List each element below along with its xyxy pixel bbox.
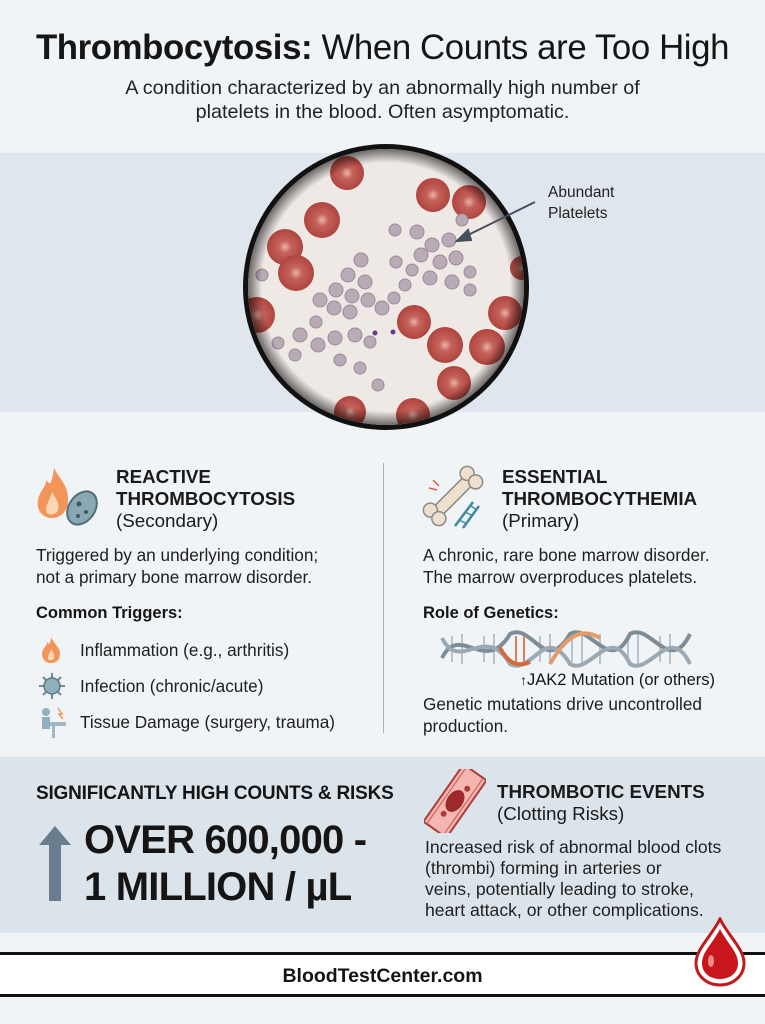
- stat: count range: 1 MILLION / µL: [84, 865, 351, 909]
- subtitle: [125, 77, 640, 123]
- text: genetics description: Genetic mutations drive uncontrolled: [423, 694, 702, 714]
- text: genetics description: production.: [423, 716, 508, 736]
- stat: count range: [84, 818, 366, 909]
- heading: essential thrombocythemia: ESSENTIAL: [502, 466, 607, 487]
- icon: blood drop: [694, 917, 746, 986]
- text: thrombotic description: veins, potentially leading to stroke,: [425, 879, 694, 899]
- heading: thrombotic events: [497, 781, 705, 824]
- list: triggers: Infection (chronic/acute): [80, 676, 263, 696]
- divider: [383, 463, 384, 733]
- icon: flame: [42, 637, 60, 663]
- text: genetics description: [423, 694, 702, 736]
- icon: blood vessel clot: [424, 769, 486, 833]
- icon: up arrow: [39, 826, 71, 901]
- heading: significantly high counts: SIGNIFICANTLY HIGH COUNTS & RISKS: [36, 783, 394, 804]
- list: triggers: Tissue Damage (surgery, trauma): [80, 712, 335, 732]
- heading: reactive thrombocytosis: REACTIVE: [116, 466, 211, 487]
- stat: count range: OVER 600,000 -: [84, 818, 366, 862]
- label: abundant platelets: [548, 184, 614, 222]
- text: essential description: [423, 545, 710, 586]
- heading: thrombotic events: THROMBOTIC EVENTS: [497, 781, 705, 802]
- footer text: BloodTestCenter.com: [282, 965, 483, 987]
- heading: essential thrombocythemia: (Primary): [502, 510, 579, 531]
- band: microscope: [0, 153, 765, 412]
- subtitle: A condition characterized by an abnormally high number of: [125, 77, 640, 99]
- diagram: dna helix: [440, 630, 692, 668]
- heading: essential thrombocythemia: THROMBOCYTHEMIA: [502, 488, 697, 509]
- label: abundant platelets: Abundant: [548, 184, 614, 201]
- footer: [0, 952, 765, 997]
- subtitle: platelets in the blood. Often asymptomatic.: [196, 101, 569, 123]
- label: jak2 mutation: ↑JAK2 Mutation (or others): [520, 671, 715, 689]
- band: risks: [0, 757, 765, 933]
- heading: thrombotic events: (Clotting Risks): [497, 803, 624, 824]
- list: triggers: [39, 637, 335, 738]
- icon: fire and germ: [38, 468, 98, 526]
- microscope view: [243, 144, 536, 430]
- text: reactive description: [36, 545, 318, 586]
- heading: reactive thrombocytosis: [116, 466, 295, 531]
- icon: virus: [39, 673, 65, 699]
- heading: reactive thrombocytosis: (Secondary): [116, 510, 218, 531]
- icon: surgery: [42, 708, 66, 738]
- arrow: to platelets: [457, 202, 535, 241]
- heading: reactive thrombocytosis: THROMBOCYTOSIS: [116, 488, 295, 509]
- panel: reactive: [36, 466, 335, 738]
- heading: role of genetics: Role of Genetics:: [423, 604, 559, 622]
- text: thrombotic description: Increased risk of abnormal blood clots: [425, 837, 721, 857]
- text: essential description: A chronic, rare bone marrow disorder.: [423, 545, 710, 565]
- title: Thrombocytosis: When Counts are Too High: [36, 28, 729, 67]
- panel: essential: [422, 466, 715, 736]
- icon: bone and dna: [422, 466, 484, 529]
- text: reactive description: Triggered by an underlying condition;: [36, 545, 318, 565]
- heading: essential thrombocythemia: [502, 466, 697, 531]
- text: thrombotic description: heart attack, or other complications.: [425, 900, 704, 920]
- text: thrombotic description: (thrombi) forming in arteries or: [425, 858, 662, 878]
- text: thrombotic description: [425, 837, 721, 920]
- list: triggers: Inflammation (e.g., arthritis): [80, 640, 289, 660]
- label: abundant platelets: Platelets: [548, 205, 607, 222]
- text: reactive description: not a primary bone marrow disorder.: [36, 566, 312, 586]
- heading: common triggers: Common Triggers:: [36, 604, 183, 622]
- text: essential description: The marrow overproduces platelets.: [423, 566, 697, 586]
